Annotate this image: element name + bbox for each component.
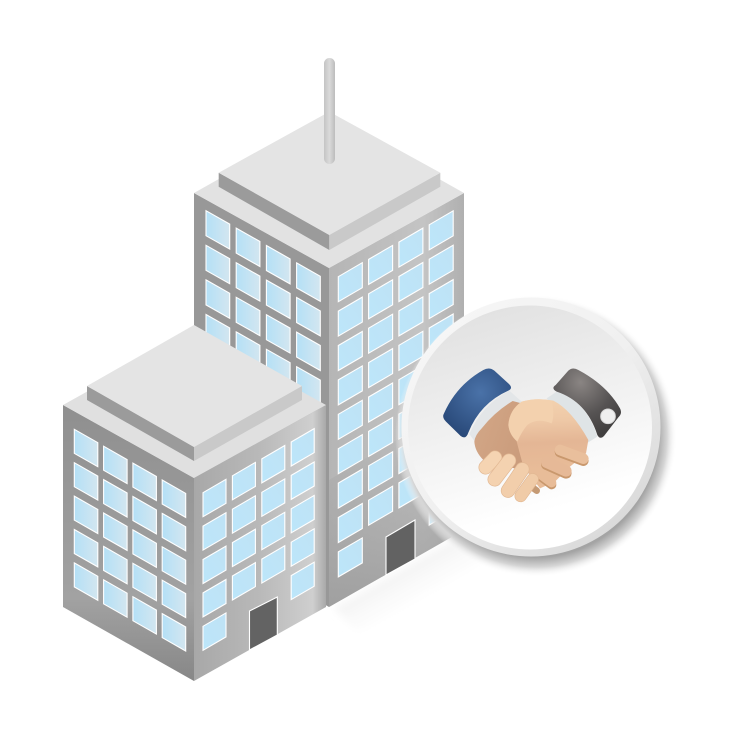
badge shadow	[395, 295, 677, 577]
front hand palm	[512, 399, 588, 488]
tower left windows	[206, 211, 320, 405]
blue sleeve	[443, 368, 511, 437]
block roof slab	[87, 325, 302, 461]
block roof	[63, 332, 326, 478]
tower right windows	[338, 211, 453, 577]
tower right face	[329, 193, 464, 607]
right shirt cuff	[547, 392, 597, 443]
icon: handshake	[443, 368, 621, 496]
sleeve button	[601, 409, 615, 424]
tower roof	[194, 117, 464, 268]
ground shadow of tall building	[334, 530, 490, 640]
back hand	[474, 401, 533, 470]
right hand fingers	[540, 450, 583, 485]
left hand fingers	[486, 458, 537, 496]
block door	[250, 597, 277, 650]
building: low block	[63, 325, 326, 681]
tower roof slab	[219, 112, 440, 250]
block left face	[63, 405, 194, 681]
antenna	[324, 58, 335, 164]
block left windows	[74, 429, 186, 651]
dark sleeve	[553, 368, 621, 438]
block right windows	[203, 429, 314, 650]
front hand thumb	[508, 399, 553, 442]
badge rim	[402, 298, 660, 556]
building: tall tower	[194, 58, 464, 607]
badge: handshake	[402, 298, 660, 556]
tower left face	[194, 193, 329, 607]
badge disc	[408, 306, 652, 550]
block right face	[194, 405, 326, 681]
tower door	[386, 520, 415, 575]
left shirt cuff	[469, 391, 522, 445]
